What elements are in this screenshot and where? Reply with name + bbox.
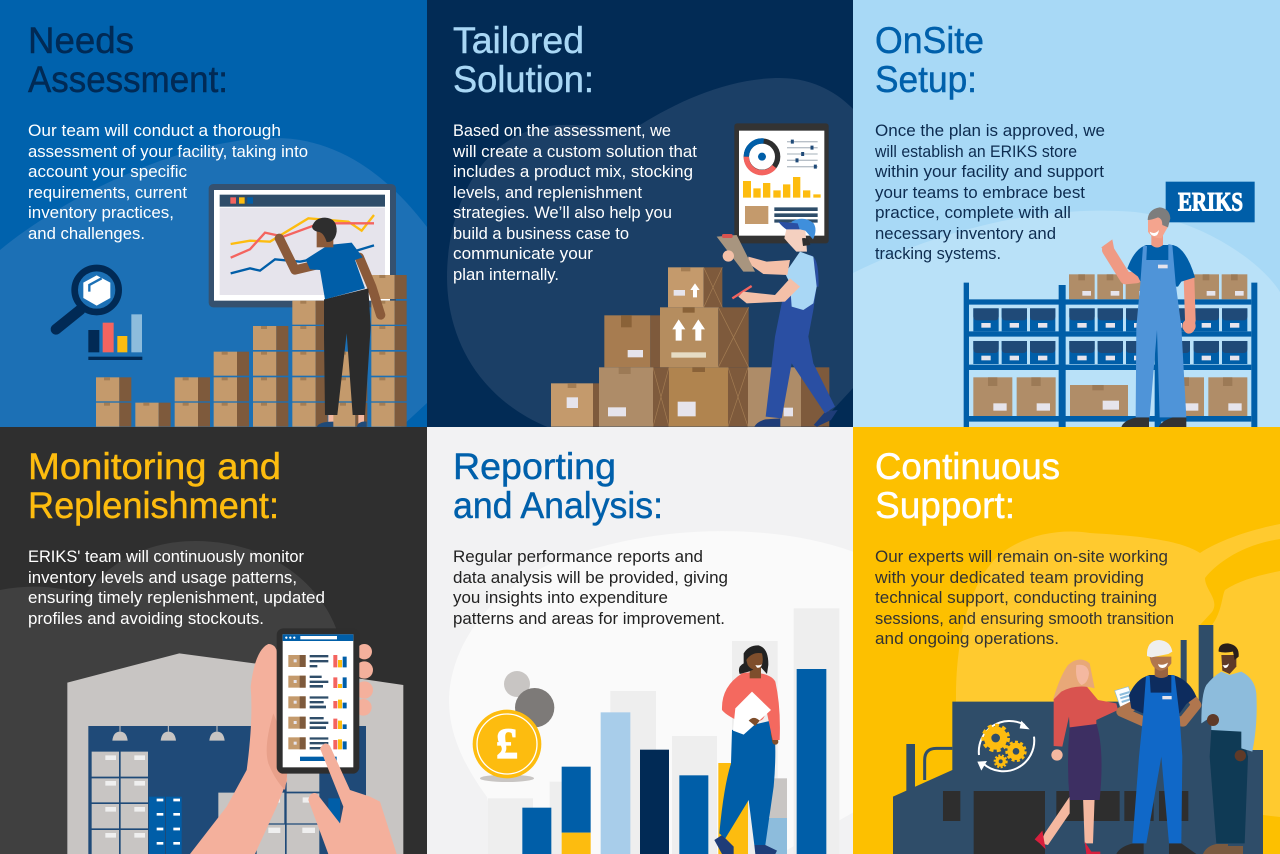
text block: needs assessment: assessment of your facility, taking into bbox=[28, 143, 308, 161]
heading: tailored solution: Tailored bbox=[453, 20, 584, 61]
illustration: woman with tablet bbox=[714, 645, 780, 854]
heading: needs assessment: Needs bbox=[28, 20, 134, 61]
text block: monitoring and replenishment bbox=[28, 548, 325, 628]
text block: reporting and analysis: you insights into expenditure bbox=[453, 589, 668, 607]
heading: monitoring and replenishment bbox=[28, 446, 281, 526]
heading: continuous support: Continuous bbox=[875, 446, 1060, 487]
illustration: smiling man in overalls bbox=[1101, 207, 1196, 427]
icon: magnifier over box bbox=[56, 268, 119, 329]
panel: continuous support bbox=[853, 427, 1280, 854]
icon: pound coin bbox=[473, 671, 554, 782]
text block: onsite setup: Once the plan is approved, we bbox=[875, 122, 1105, 140]
heading: monitoring and replenishment: Monitoring and bbox=[28, 446, 281, 487]
text block: reporting and analysis: patterns and areas for improvement. bbox=[453, 610, 725, 628]
text block: tailored solution: will create a custom solution that bbox=[452, 143, 697, 161]
text block: reporting and analysis: Regular performance reports and bbox=[453, 548, 703, 566]
text block: tailored solution bbox=[452, 122, 697, 284]
panel: needs assessment bbox=[0, 0, 427, 428]
heading: reporting and analysis: and Analysis: bbox=[453, 485, 663, 526]
text block: onsite setup: necessary inventory and bbox=[875, 225, 1056, 243]
illustration: factory building bbox=[893, 625, 1263, 854]
illustration: engineer in overalls bbox=[1116, 640, 1196, 854]
illustration: man in light blue shirt bbox=[1201, 643, 1257, 854]
text block: tailored solution: communicate your bbox=[453, 245, 594, 263]
text block: onsite setup: your teams to embrace best bbox=[875, 184, 1085, 202]
heading: onsite setup bbox=[875, 20, 984, 100]
text block: needs assessment bbox=[28, 122, 308, 243]
illustration: worker with clipboard bbox=[717, 219, 838, 427]
heading: continuous support bbox=[875, 446, 1060, 526]
heading: onsite setup: OnSite bbox=[875, 20, 984, 61]
text block: continuous support: Our experts will remain on-site working bbox=[875, 548, 1168, 566]
heading: onsite setup: Setup: bbox=[875, 59, 977, 100]
heading: continuous support: Support: bbox=[875, 485, 1015, 526]
illustration: warehouse interior bbox=[67, 653, 403, 854]
text block: onsite setup: will establish an ERIKS store bbox=[874, 143, 1077, 161]
heading: tailored solution bbox=[453, 20, 594, 100]
heading: needs assessment: Assessment: bbox=[28, 59, 228, 100]
icon: mini bar chart bbox=[88, 314, 142, 360]
illustration: person drawing on chart bbox=[279, 218, 381, 427]
heading: tailored solution: Solution: bbox=[453, 59, 594, 100]
heading: reporting and analysis: Reporting bbox=[453, 446, 616, 487]
illustration: blue shelving with boxes and bins bbox=[964, 274, 1257, 427]
text block: needs assessment: requirements, current bbox=[28, 184, 187, 202]
text block: needs assessment: Our team will conduct a thorough bbox=[28, 122, 281, 140]
illustration: woman with clipboard bbox=[1035, 660, 1135, 854]
text block: needs assessment: and challenges. bbox=[28, 225, 145, 243]
text block: onsite setup: practice, complete with all bbox=[875, 204, 1071, 222]
text block: continuous support: with your dedicated team providing bbox=[874, 569, 1144, 587]
text block: reporting and analysis: data analysis will be provided, giving bbox=[453, 569, 728, 587]
text block: tailored solution: includes a product mix, stocking bbox=[453, 163, 693, 181]
bar chart bbox=[488, 608, 839, 854]
text block: tailored solution: build a business case to bbox=[453, 225, 629, 243]
heading: reporting and analysis bbox=[453, 446, 663, 526]
text block: onsite setup bbox=[874, 122, 1105, 263]
illustration: pile of cardboard boxes bbox=[551, 267, 829, 427]
text block: continuous support bbox=[874, 548, 1174, 648]
illustration: stacked boxes bbox=[96, 275, 407, 427]
text block: monitoring and replenishment: inventory levels and usage patterns, bbox=[28, 569, 297, 587]
panel: monitoring and replenishment bbox=[0, 427, 427, 854]
panel: reporting and analysis bbox=[427, 427, 854, 854]
illustration: dashboard tablet bbox=[734, 123, 829, 243]
text block: tailored solution: strategies. We’ll also help you bbox=[453, 204, 672, 222]
heading: needs assessment bbox=[28, 20, 228, 100]
text block: monitoring and replenishment: ensuring timely replenishment, updated bbox=[28, 589, 325, 607]
text block: monitoring and replenishment: ERIKS' team will continuously monitor bbox=[28, 548, 305, 566]
text block: continuous support: and ongoing operations. bbox=[875, 630, 1059, 648]
illustration: monitor with line chart bbox=[209, 184, 396, 307]
text block: needs assessment: inventory practices, bbox=[28, 204, 174, 222]
text block: needs assessment: account your specific bbox=[28, 163, 187, 181]
text block: tailored solution: levels, and replenishment bbox=[453, 184, 642, 202]
text block: continuous support: sessions, and ensuring smooth transition bbox=[875, 610, 1174, 628]
text block: reporting and analysis bbox=[453, 548, 728, 628]
panel: tailored solution bbox=[427, 0, 854, 428]
text block: continuous support: technical support, conducting training bbox=[875, 589, 1157, 607]
panel: onsite setup bbox=[853, 0, 1280, 428]
text block: tailored solution: plan internally. bbox=[453, 266, 559, 284]
text block: onsite setup: within your facility and support bbox=[874, 163, 1104, 181]
text block: onsite setup: tracking systems. bbox=[875, 245, 1001, 263]
illustration: hands holding phone bbox=[190, 628, 397, 854]
icon: gears with cycle arrows bbox=[977, 721, 1034, 771]
sign: ERIKS logo bbox=[1166, 182, 1255, 222]
sign: ERIKS logo: ERIKS bbox=[1178, 188, 1243, 217]
text block: monitoring and replenishment: profiles and avoiding stockouts. bbox=[28, 610, 264, 628]
text block: tailored solution: Based on the assessment, we bbox=[453, 122, 671, 140]
heading: monitoring and replenishment: Replenishment: bbox=[28, 485, 279, 526]
icon: pound coin: £ bbox=[496, 720, 518, 768]
